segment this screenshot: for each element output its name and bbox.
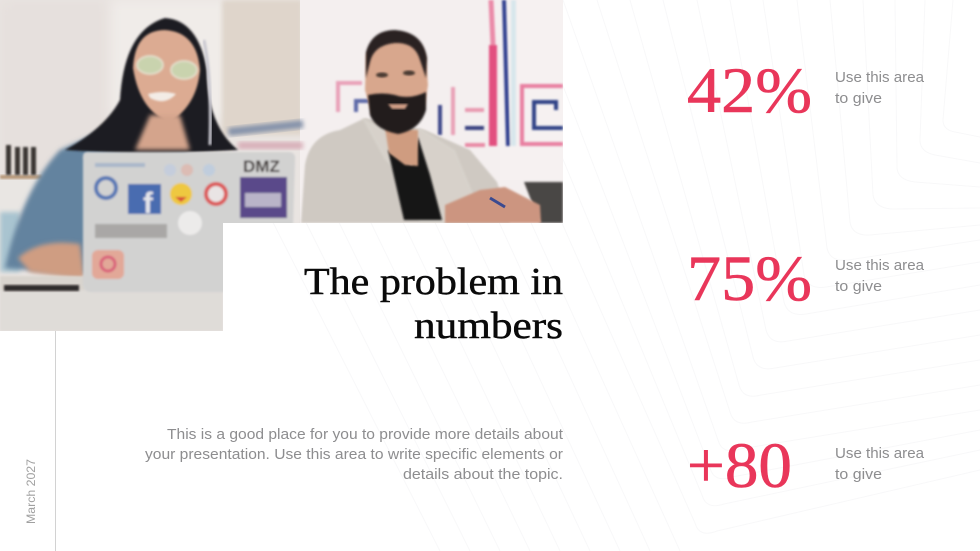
stat: 42% (687, 55, 925, 127)
stat: 75%: Use this area (835, 258, 925, 274)
vertical divider (55, 331, 56, 551)
body text: details about the topic. (403, 467, 563, 483)
laptop with stickers: f (143, 187, 154, 220)
date label: March 2027 (24, 459, 38, 524)
photo: two colleagues at a table with a laptop (0, 0, 563, 331)
stat: 75%: to give (835, 279, 882, 295)
laptop with stickers (83, 152, 295, 292)
man in beige blazer (301, 30, 563, 223)
stat: 42%: 42% (687, 55, 812, 127)
table (1, 291, 222, 330)
title (304, 261, 563, 347)
laptop with stickers: DMZ (243, 157, 280, 176)
stat: 75%: 75% (687, 243, 812, 315)
woman with long dark hair and denim shirt (5, 18, 238, 280)
stat: 75% (687, 243, 925, 315)
title: The problem in (304, 261, 563, 303)
title: numbers (414, 305, 563, 347)
stat: +80: Use this area (835, 446, 925, 462)
stat: +80: +80 (687, 430, 792, 502)
stat: +80 (687, 430, 925, 502)
office wall background (0, 0, 563, 272)
stat: 42%: Use this area (835, 70, 925, 86)
stat: 42%: to give (835, 91, 882, 107)
body text: This is a good place for you to provide more details about (167, 427, 563, 443)
body text (145, 427, 563, 483)
stat: +80: to give (835, 467, 882, 483)
body text: your presentation. Use this area to write specific elements or (145, 447, 563, 463)
wall art: pink and navy stripes (338, 0, 563, 146)
